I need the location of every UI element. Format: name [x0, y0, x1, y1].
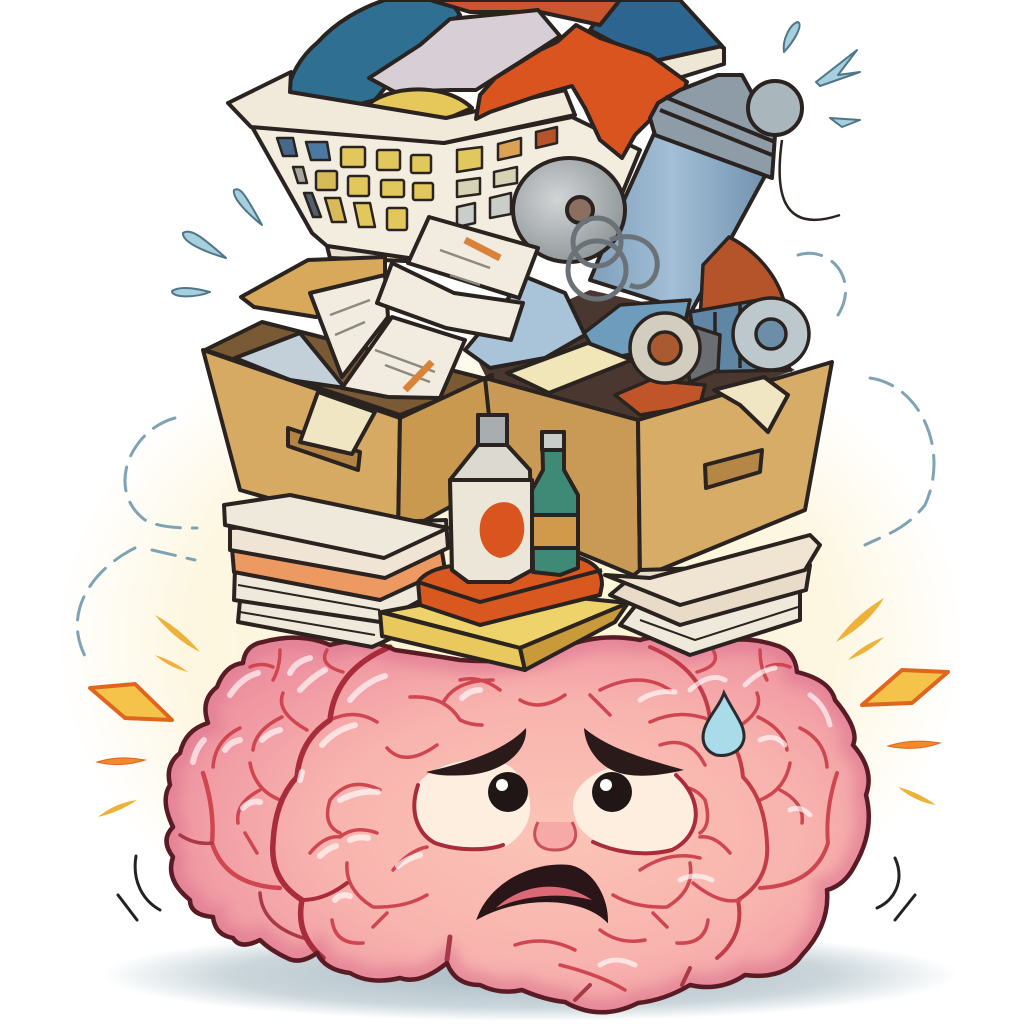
pupils — [488, 772, 528, 812]
silver bottle — [450, 415, 532, 582]
orange cloth — [476, 25, 687, 158]
mouth — [478, 866, 607, 921]
dashed motion lines — [77, 253, 934, 665]
background glow — [55, 300, 965, 980]
sweat drop — [703, 693, 744, 755]
laundry basket — [228, 72, 640, 262]
brain folds right — [460, 647, 837, 1000]
stack of papers — [310, 217, 538, 398]
eye whites — [413, 759, 530, 851]
brain outline — [166, 637, 869, 1012]
left book stack — [224, 495, 448, 647]
eyebrows — [426, 728, 526, 776]
right cardboard box — [485, 343, 832, 578]
dumbbell parts — [630, 298, 809, 383]
blue sack — [465, 277, 585, 368]
stress sparks left — [90, 615, 200, 817]
thermos bottle — [590, 75, 840, 312]
right book stack — [605, 535, 820, 655]
pile backing — [470, 290, 795, 425]
blue sweat marks — [172, 22, 860, 296]
metal rings — [568, 218, 657, 299]
basket holes — [277, 127, 557, 230]
shake lines — [118, 856, 915, 920]
back basket rim — [620, 42, 724, 90]
brain highlights — [193, 658, 830, 965]
left cardboard box — [203, 322, 492, 535]
yellow book — [380, 590, 628, 670]
face — [413, 693, 744, 921]
brain — [166, 637, 869, 1012]
ground shadow — [102, 929, 958, 1021]
clothes pile — [285, 0, 722, 122]
rust gear pile behind right box — [584, 237, 785, 415]
left flat folder — [241, 257, 385, 317]
green bottle — [532, 432, 578, 575]
orange tray — [418, 558, 602, 625]
stress sparks right — [836, 598, 948, 805]
metal disc — [513, 158, 625, 262]
nose — [535, 822, 576, 850]
brain folds left — [180, 647, 493, 960]
